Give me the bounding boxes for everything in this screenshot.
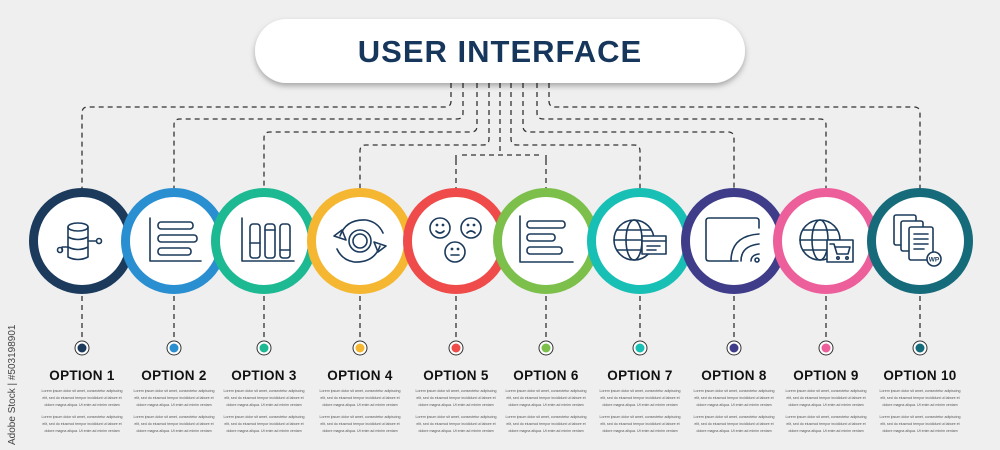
description texts: elit, sed do eiusmod tempor incididunt ut labore et — [134, 422, 214, 426]
description texts: dolore magna aliqua. Ut enim ad minim veniam — [226, 403, 302, 407]
description texts: dolore magna aliqua. Ut enim ad minim veniam — [418, 429, 494, 433]
option 5 — [408, 192, 504, 290]
option labels: OPTION 4 — [327, 368, 393, 383]
description texts: Lorem ipsum dolor sit amet, consectetur adipiscing — [224, 415, 304, 419]
description texts: Lorem ipsum dolor sit amet, consectetur adipiscing — [786, 389, 866, 393]
description texts: elit, sed do eiusmod tempor incididunt ut labore et — [42, 422, 122, 426]
description texts: elit, sed do eiusmod tempor incididunt ut labore et — [42, 396, 122, 400]
icon: cast screen — [706, 218, 759, 262]
option labels: OPTION 6 — [513, 368, 579, 383]
description texts: elit, sed do eiusmod tempor incididunt ut labore et — [506, 422, 586, 426]
description texts: elit, sed do eiusmod tempor incididunt ut labore et — [600, 396, 680, 400]
icon: bar chart left — [520, 216, 573, 262]
option 10: WP — [929, 256, 940, 264]
description texts: elit, sed do eiusmod tempor incididunt ut labore et — [694, 422, 774, 426]
description texts: Lorem ipsum dolor sit amet, consectetur adipiscing — [320, 389, 400, 393]
option 3 — [216, 192, 312, 290]
description texts: Lorem ipsum dolor sit amet, consectetur adipiscing — [134, 389, 214, 393]
option 7 — [592, 192, 688, 290]
description texts: Lorem ipsum dolor sit amet, consectetur adipiscing — [694, 415, 774, 419]
bottom connectors and dots — [82, 296, 920, 338]
description texts: Lorem ipsum dolor sit amet, consectetur adipiscing — [42, 415, 122, 419]
option labels: OPTION 3 — [231, 368, 297, 383]
description texts: dolore magna aliqua. Ut enim ad minim veniam — [696, 403, 772, 407]
icon: database — [58, 223, 102, 260]
option 1 — [34, 192, 130, 290]
side credit: Adobe Stock | #503198901 — [7, 324, 18, 445]
description texts: dolore magna aliqua. Ut enim ad minim veniam — [136, 429, 212, 433]
description texts: dolore magna aliqua. Ut enim ad minim veniam — [788, 403, 864, 407]
description texts — [42, 389, 960, 433]
icon: globe browser — [614, 220, 666, 260]
description texts: Lorem ipsum dolor sit amet, consectetur adipiscing — [416, 415, 496, 419]
description texts: dolore magna aliqua. Ut enim ad minim veniam — [418, 403, 494, 407]
description texts: Lorem ipsum dolor sit amet, consectetur adipiscing — [42, 389, 122, 393]
title: USER INTERFACE — [358, 34, 642, 69]
option 10 — [872, 192, 968, 290]
icon: emoji faces — [430, 218, 481, 262]
title — [255, 19, 745, 83]
description texts: dolore magna aliqua. Ut enim ad minim veniam — [44, 403, 120, 407]
option labels: OPTION 1 — [49, 368, 115, 383]
icon: vertical bars — [242, 218, 294, 261]
option 2 — [126, 192, 222, 290]
description texts: Lorem ipsum dolor sit amet, consectetur adipiscing — [320, 415, 400, 419]
description texts: dolore magna aliqua. Ut enim ad minim veniam — [44, 429, 120, 433]
description texts: elit, sed do eiusmod tempor incididunt ut labore et — [224, 396, 304, 400]
description texts: Lorem ipsum dolor sit amet, consectetur adipiscing — [134, 415, 214, 419]
connector lines — [82, 83, 920, 188]
description texts: Lorem ipsum dolor sit amet, consectetur adipiscing — [506, 389, 586, 393]
description texts: Lorem ipsum dolor sit amet, consectetur adipiscing — [694, 389, 774, 393]
description texts: Lorem ipsum dolor sit amet, consectetur adipiscing — [506, 415, 586, 419]
description texts: elit, sed do eiusmod tempor incididunt ut labore et — [786, 422, 866, 426]
description texts: elit, sed do eiusmod tempor incididunt ut labore et — [880, 422, 960, 426]
description texts: dolore magna aliqua. Ut enim ad minim veniam — [322, 429, 398, 433]
description texts: elit, sed do eiusmod tempor incididunt ut labore et — [786, 396, 866, 400]
option labels: OPTION 10 — [883, 368, 957, 383]
description texts: Lorem ipsum dolor sit amet, consectetur adipiscing — [880, 415, 960, 419]
description texts: elit, sed do eiusmod tempor incididunt ut labore et — [880, 396, 960, 400]
description texts: dolore magna aliqua. Ut enim ad minim veniam — [602, 403, 678, 407]
description texts: elit, sed do eiusmod tempor incididunt ut labore et — [694, 396, 774, 400]
description texts: dolore magna aliqua. Ut enim ad minim veniam — [508, 429, 584, 433]
icon: globe cart — [800, 220, 853, 262]
description texts: Lorem ipsum dolor sit amet, consectetur adipiscing — [416, 389, 496, 393]
description texts: elit, sed do eiusmod tempor incididunt ut labore et — [320, 422, 400, 426]
description texts: Lorem ipsum dolor sit amet, consectetur adipiscing — [224, 389, 304, 393]
description texts: elit, sed do eiusmod tempor incididunt ut labore et — [320, 396, 400, 400]
description texts: dolore magna aliqua. Ut enim ad minim veniam — [136, 403, 212, 407]
description texts: Lorem ipsum dolor sit amet, consectetur adipiscing — [786, 415, 866, 419]
option labels — [49, 368, 957, 383]
description texts: dolore magna aliqua. Ut enim ad minim veniam — [882, 403, 958, 407]
option labels: OPTION 8 — [701, 368, 767, 383]
option labels: OPTION 5 — [423, 368, 489, 383]
option 4 — [312, 192, 408, 290]
description texts: elit, sed do eiusmod tempor incididunt ut labore et — [600, 422, 680, 426]
description texts: elit, sed do eiusmod tempor incididunt ut labore et — [416, 396, 496, 400]
description texts: dolore magna aliqua. Ut enim ad minim veniam — [696, 429, 772, 433]
description texts: Lorem ipsum dolor sit amet, consectetur adipiscing — [880, 389, 960, 393]
description texts: dolore magna aliqua. Ut enim ad minim veniam — [882, 429, 958, 433]
description texts: elit, sed do eiusmod tempor incididunt ut labore et — [134, 396, 214, 400]
option labels: OPTION 7 — [607, 368, 673, 383]
description texts: elit, sed do eiusmod tempor incididunt ut labore et — [506, 396, 586, 400]
icon: WP documents — [894, 215, 941, 266]
description texts: Lorem ipsum dolor sit amet, consectetur adipiscing — [600, 389, 680, 393]
icon: horizontal bar chart — [150, 218, 201, 261]
option 9 — [778, 192, 874, 290]
description texts: dolore magna aliqua. Ut enim ad minim veniam — [226, 429, 302, 433]
description texts: dolore magna aliqua. Ut enim ad minim veniam — [322, 403, 398, 407]
option 6 — [498, 192, 594, 290]
option labels: OPTION 9 — [793, 368, 859, 383]
description texts: elit, sed do eiusmod tempor incididunt ut labore et — [224, 422, 304, 426]
option 8 — [686, 192, 782, 290]
description texts: elit, sed do eiusmod tempor incididunt ut labore et — [416, 422, 496, 426]
icon: refresh — [334, 220, 386, 262]
option labels: OPTION 2 — [141, 368, 207, 383]
description texts: dolore magna aliqua. Ut enim ad minim veniam — [602, 429, 678, 433]
description texts: Lorem ipsum dolor sit amet, consectetur adipiscing — [600, 415, 680, 419]
description texts: dolore magna aliqua. Ut enim ad minim veniam — [508, 403, 584, 407]
description texts: dolore magna aliqua. Ut enim ad minim veniam — [788, 429, 864, 433]
